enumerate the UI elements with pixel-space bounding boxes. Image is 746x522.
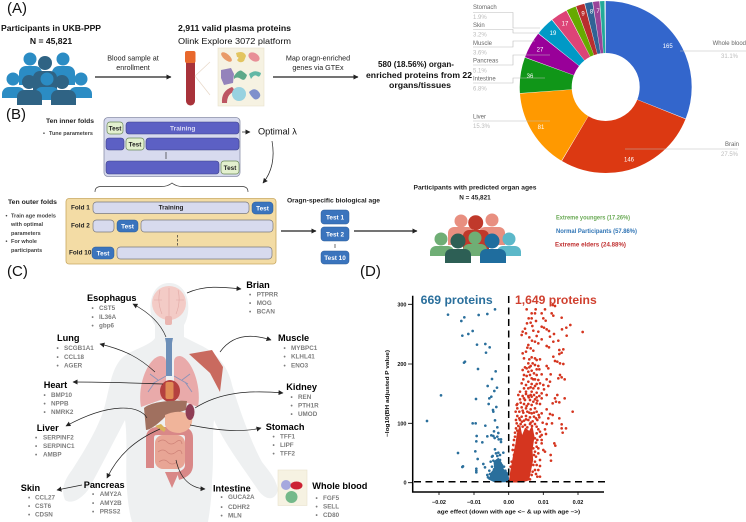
brace [95,183,248,192]
organ: stomach [165,412,192,433]
donut chart: organ protein counts: 81 [538,125,545,131]
label: skin: • [28,512,30,518]
label: muscle: • [284,354,286,361]
arrow: blood sample: Blood sample at [107,54,159,62]
label: pancreas [84,480,125,516]
donut chart: organ protein counts: 31.1% [721,54,739,60]
panel label D: (D) [360,263,381,280]
heading: predicted organ ages: Participants with predicted organ ages [414,184,537,192]
x axis labels: −0.01 [467,500,481,506]
label: whole blood: SELL [323,504,339,511]
text: optimal lambda: Optimal λ [258,126,297,136]
x axis labels: 0.02 [573,500,583,506]
label: pancreas: • [92,500,94,507]
label: whole blood [312,481,367,519]
label: kidney: • [290,402,293,410]
label: pancreas: • [92,491,94,498]
heading: participants [1,23,101,46]
heading: plasma proteins: Olink Explore 3072 platform [178,36,291,46]
donut chart: organ protein counts: 8 [590,10,594,16]
label: kidney [286,382,319,418]
donut chart: organ protein counts: 15.3% [473,124,491,130]
count: down proteins: 669 proteins [421,293,493,307]
text: ten outer folds: • [6,214,8,220]
label: stomach: • [272,450,275,458]
label: esophagus: • [92,314,94,321]
organ: intestine [150,431,189,488]
label: stomach: • [272,434,275,440]
donut chart: organ protein counts: 3.2% [473,32,487,38]
label: brian: • [249,292,251,298]
arrow: folds to biological age [281,230,316,232]
x axis labels: −0.02 [432,500,446,506]
label: skin: Skin [21,483,40,493]
arrow: map via GTEx: genes via GTEx [292,63,344,72]
diagram: outer folds: Test [256,206,270,212]
text: ten outer folds: Train age models [11,214,56,220]
donut chart: organ protein counts: Pancreas [473,58,498,64]
label: lung: Lung [57,333,79,343]
diagram: inner folds: Test [109,126,122,132]
diagram: outer folds [66,198,276,264]
organ: liver [144,401,187,430]
organ: brain [152,286,186,325]
label: intestine: • [220,504,223,511]
y axis labels [397,302,406,487]
arrow: lambda to outer folds [263,141,273,183]
x axis labels: 0.01 [538,500,549,506]
label: muscle: Muscle [278,333,309,343]
organ: muscle [189,350,223,392]
label: liver: Liver [37,423,59,433]
y axis labels: 200 [397,362,406,368]
panel label B: (B) [6,106,26,123]
label: whole blood: FGF5 [323,495,340,502]
text: ten outer folds: parameters [11,231,41,237]
label: heart: NPPB [51,400,69,408]
donut chart: organ protein counts: Liver [473,114,486,120]
label: heart: • [44,409,46,416]
label: intestine [213,484,255,520]
heading: organ-specific biological age: Oragn-specific biological age [287,198,380,204]
diagram: outer folds: Test [121,224,135,230]
donut chart: organ protein counts: 1.9% [473,15,487,21]
label: heart: BMP10 [51,392,72,399]
panel B: model training [6,106,637,264]
label: lung: CCL18 [64,354,84,361]
icon: blood tube [185,51,196,106]
label: brian: MOG [257,300,272,307]
label: esophagus [87,293,137,330]
arrows: organs to labels [57,287,283,490]
heading: participants: Participants in UKB-PPP [1,23,101,33]
label: brian: PTPRR [257,292,278,298]
heading: predicted organ ages: N = 45,821 [459,194,491,202]
label: lung: • [56,362,59,370]
text: ten outer folds: For whole [11,239,37,245]
arrow: tests to predicted ages [354,230,417,232]
label: esophagus: gbp6 [99,322,115,330]
y axis labels: 300 [397,302,406,308]
label: lung: • [56,354,59,361]
icon: blue participant group [2,52,92,105]
donut chart: organ protein counts: 5.1% [473,68,487,74]
label: muscle: KLHL41 [291,354,315,361]
text: ten inner folds: Tune parameters [49,131,93,137]
heading: participants: N = 45,821 [30,36,72,46]
heading: organ-enriched proteins: organs/tissues [389,80,451,90]
blue points: down with age [427,309,509,482]
dashed reference lines [414,296,605,492]
text: ten outer folds [6,199,57,254]
donut chart: organ protein counts: 165 [663,44,673,50]
boxes: test sets: Test 10 [324,255,346,262]
label: liver: • [35,434,37,442]
label: skin [21,483,55,518]
label: whole blood: Whole blood [312,481,367,491]
panel label C: (C) [7,263,28,280]
text: ten inner folds: Ten inner folds [46,118,94,125]
diagram: outer folds: Fold 2 [71,222,90,230]
diagram: outer folds: Test [97,250,110,258]
label: lung: AGER [64,362,83,370]
heading: organ-enriched proteins [366,59,472,90]
text: ten outer folds: • [6,239,8,245]
diagram: inner folds [104,118,240,176]
label: muscle [278,333,318,370]
legend: participant groups: Normal Participants (57.86%) [556,228,637,235]
heading: plasma proteins: 2,911 valid plasma proteins [178,23,291,33]
donut chart: organ protein counts: Whole blood [713,41,746,47]
label: lung: • [56,345,59,352]
label: whole blood: • [316,504,318,511]
label: muscle: MYBPC1 [291,345,318,352]
diagram: inner folds: Training [170,126,195,132]
label: pancreas: AMY2B [100,500,122,507]
panel A: study design [1,0,746,164]
panel D: volcano plot [360,263,605,516]
label: esophagus: Esophagus [87,293,137,303]
label: stomach: Stomach [266,422,305,432]
donut chart: organ protein counts: 36 [527,74,534,80]
donut chart: organ protein counts: Stomach [473,5,497,11]
organ: esophagus and trachea [165,338,173,376]
x axis labels [432,500,583,506]
label: brian: BCAN [257,308,275,316]
donut chart: organ protein counts: Brain [725,142,739,148]
label: esophagus: CST5 [99,305,116,312]
label: kidney: UMOD [298,411,318,418]
label: pancreas: AMY2A [100,491,122,498]
icon: coloured participant group [430,214,521,263]
label: pancreas: PRSS2 [100,508,121,516]
donut chart: organ protein counts: Skin [473,23,485,29]
diagram: outer folds: Fold 1 [71,204,90,212]
diagram: outer folds: Training [159,204,184,212]
label: pancreas: Pancreas [84,480,125,490]
label: skin: • [28,494,30,502]
arrow: blood sample: enrollment [116,63,150,72]
donut chart: organ protein counts [473,5,746,164]
label: esophagus: IL36A [99,314,117,321]
label: kidney: REN [298,394,312,401]
label: brian: • [249,300,251,307]
red points: up with age [509,305,583,482]
label: brian: Brian [246,280,270,290]
icon: blood cells [278,470,307,506]
donut chart: organ protein counts: 3.6% [473,50,487,56]
label: intestine: Intestine [213,484,251,494]
heading: organ-enriched proteins: enriched proteins from 22 [366,70,472,80]
label: heart: • [44,392,46,399]
donut chart: organ protein counts: 17 [562,22,569,28]
label: liver: • [35,452,37,458]
x axis labels: 0.00 [503,500,514,506]
label: liver [35,423,75,458]
legend: participant groups: Extreme youngers (17.26%) [556,214,630,221]
organ: heart [160,380,180,402]
label: pancreas: • [92,508,94,516]
label: intestine: GUCA2A [228,494,255,501]
label: skin: CCL27 [35,494,55,502]
count: up proteins: 1,649 proteins [515,293,597,307]
boxes: test sets: Test 1 [326,214,344,222]
donut chart: organ protein counts: Intestine [473,76,496,82]
y axis labels: 0 [403,481,406,487]
legend: participant groups: Extreme elders (24.88%) [555,241,626,248]
organ: kidney [186,404,194,420]
label: lung: SCGB1A1 [64,345,94,352]
label: skin: CST6 [35,503,52,510]
donut chart: organ protein counts: 7 [596,9,600,15]
label: intestine: • [220,494,223,501]
label: whole blood: • [316,495,318,502]
label: intestine: CDHR2 [228,504,250,511]
label: liver: AMBP [43,452,62,458]
donut chart: organ protein counts: 9 [581,12,585,18]
donut chart: organ protein counts: 146 [624,158,635,164]
label: kidney: • [290,394,293,401]
label: skin: CDSN [35,512,53,518]
text: ten outer folds: with optimal [10,222,44,228]
legend: participant groups [555,214,637,248]
text: ten inner folds: • [43,131,45,137]
label: whole blood: • [316,512,318,519]
label: stomach: TFF2 [280,450,296,458]
arrow: blood sample [95,54,171,77]
label: intestine: • [220,512,223,520]
diagram: outer folds: Fold 10 [69,250,92,256]
organ: pancreas [155,424,166,432]
donut chart: organ protein counts: 27 [537,48,544,54]
label: stomach [266,422,305,458]
heading: organ-enriched proteins: 580 (18.56%) organ- [378,59,454,69]
label: stomach: TFF1 [280,434,296,440]
label: muscle: • [284,362,286,370]
arrow: map via GTEx [273,54,358,77]
label: kidney: Kidney [286,382,318,392]
label: liver: SERPINF2 [43,434,74,442]
diagram: inner folds: Test [224,165,237,172]
donut chart: organ protein counts: Muscle [473,41,493,47]
illustration: human body with organs [63,283,278,522]
boxes: test sets: Test 2 [326,232,344,238]
label: kidney: PTH1R [298,402,319,410]
axes [408,296,604,495]
label: liver: • [35,443,37,450]
scatter: protein points [427,305,583,482]
label: skin: • [28,503,30,510]
heading: predicted organ ages [414,184,537,202]
organ: lungs [140,356,199,407]
donut chart: organ protein counts: 19 [550,31,557,37]
label: liver: SERPINC1 [43,443,75,450]
label: heart: NMRK2 [51,409,74,416]
donut chart: organ protein counts: 6.8% [473,86,487,92]
label: brian [246,280,278,316]
label: stomach: • [272,442,275,449]
text: ten inner folds [43,118,94,137]
label: heart: • [44,400,46,408]
panel: organ illustrations [218,48,264,106]
y axis title: −log10(BH adjusted P value) [385,350,391,437]
arrow: map via GTEx: Map oragn-enriched [286,54,350,62]
label: muscle: ENO3 [291,362,309,370]
label: heart [44,380,74,416]
label: kidney: • [290,411,293,418]
boxes: test sets [321,210,349,264]
donut chart: organ protein counts: 27.5% [721,152,739,158]
panel label A: (A) [7,0,27,17]
label: muscle: • [284,345,286,352]
label: heart: Heart [44,380,67,390]
text: ten outer folds: participants [11,248,42,254]
label: esophagus: • [92,305,94,312]
label: stomach: LIPF [280,442,294,449]
heading: plasma proteins [178,23,291,46]
text: ten outer folds: Ten outer folds [8,199,57,206]
label: brian: • [249,308,251,316]
x axis title: age effect (down with age <– & up with age –>) [437,510,580,516]
label: esophagus: • [92,322,94,330]
y axis labels: 100 [397,421,406,427]
diagram: inner folds: Test [129,142,142,148]
panel C: organ map [7,263,367,522]
label: lung [56,333,94,370]
label: intestine: MLN [228,512,242,520]
label: whole blood: CD80 [323,512,340,519]
